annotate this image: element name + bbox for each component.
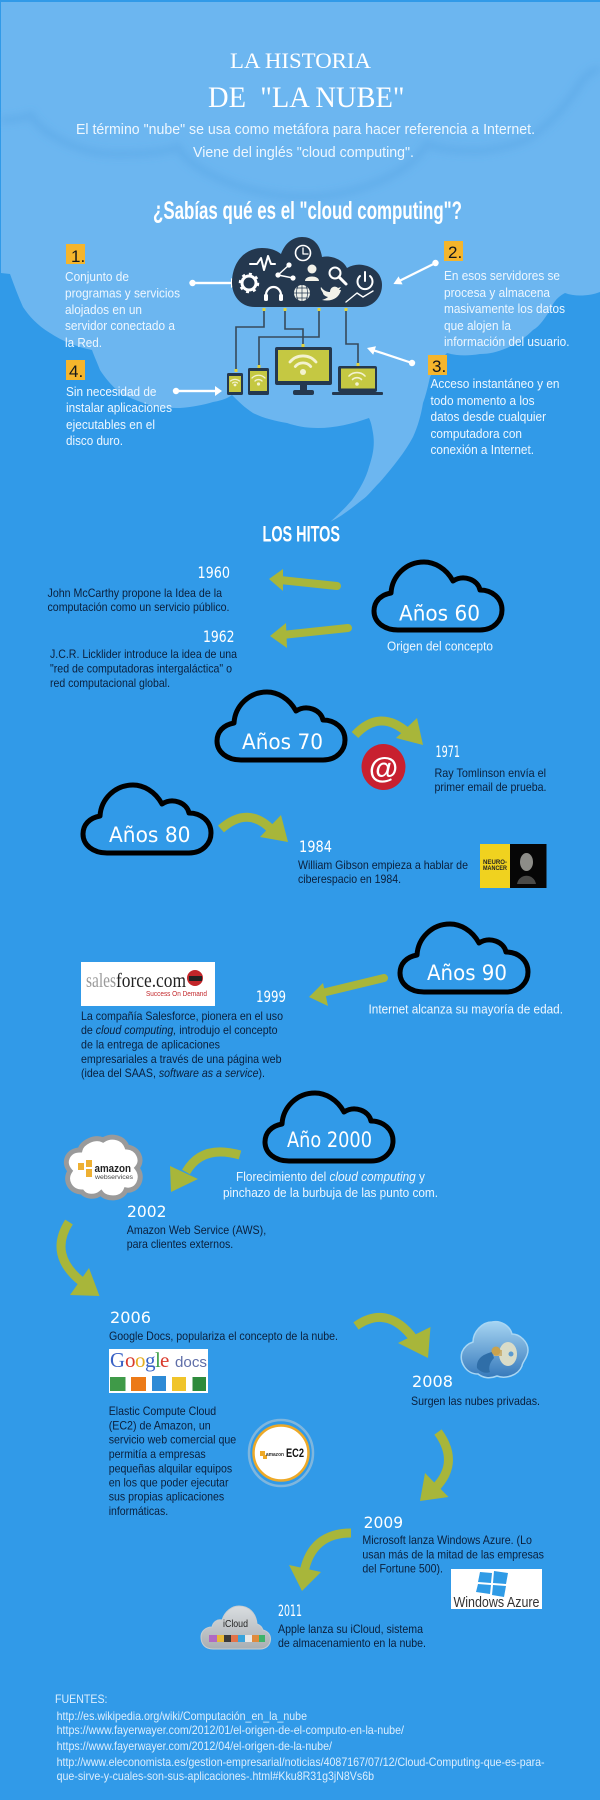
milestone 1984: ciberespacio en 1984. <box>298 872 401 886</box>
logo: amazon web services: webservices <box>94 1175 133 1181</box>
logo: amazon EC2 <box>249 1420 313 1486</box>
logo: windows azure: Windows Azure <box>454 1594 540 1611</box>
panel: point 1: la Red. <box>65 335 102 350</box>
panel: point 4: ejecutables en el <box>66 417 155 432</box>
milestone 1960: John McCarthy propone la Idea de la <box>48 586 222 600</box>
milestone 1960: computación como un servicio público. <box>48 600 230 614</box>
milestone 2011: Apple lanza su iCloud, sistema <box>278 1622 423 1636</box>
cloud: años 90 <box>400 924 528 992</box>
panel: point 3: Acceso instantáneo y en <box>430 376 560 391</box>
logo: salesforce: sales <box>86 970 116 992</box>
panel: point 1: servidor conectado a <box>65 318 176 333</box>
sources: https://www.fayerwayer.com/2012/04/el-origen-de-la-nube/ <box>57 1739 333 1753</box>
icon: email at sign <box>362 744 406 790</box>
milestone 2008: Surgen las nubes privadas. <box>411 1394 540 1408</box>
title: LA HISTORIA <box>230 48 372 73</box>
cloud: años 80: Años 80 <box>109 823 190 847</box>
milestone 2002: para clientes externos. <box>127 1237 233 1251</box>
milestone: EC2 text: servicio web comercial que <box>109 1433 236 1447</box>
cloud: años 60: Años 60 <box>399 602 480 626</box>
milestone 1971: primer email de prueba. <box>434 780 546 794</box>
logo: google docs <box>109 1348 208 1393</box>
cloud: años 90: Años 90 <box>427 961 507 985</box>
panel: point 4: instalar aplicaciones <box>66 400 172 415</box>
milestone: EC2 text: sus propias aplicaciones <box>109 1490 224 1504</box>
cloud: años 70 <box>217 692 345 760</box>
milestone 2011: 2011 <box>278 1601 302 1620</box>
logo: salesforce: Success On Demand <box>146 991 207 998</box>
milestone 1962: 1962 <box>203 627 234 646</box>
logo: windows azure <box>451 1569 542 1611</box>
milestone: EC2 text <box>109 1404 236 1518</box>
icon: private cloud with key <box>461 1322 528 1378</box>
panel: point 1: Conjunto de <box>65 269 129 284</box>
milestone 1962 <box>50 627 237 690</box>
icon: iCloud: iCloud <box>223 1619 248 1630</box>
caption: origen del concepto: Origen del concepto <box>387 638 493 654</box>
milestone 1962: "red de computadoras intergaláctica" o <box>50 662 232 676</box>
milestone 1999: (idea del SAAS, software as a service). <box>81 1066 265 1080</box>
panel: point 4: 4. <box>69 362 83 381</box>
logo: google docs: e <box>160 1348 169 1372</box>
logo: salesforce <box>81 962 215 1006</box>
panel: point 1: 1. <box>71 247 85 266</box>
cloud: años 70: Años 70 <box>242 730 323 754</box>
cloud: año 2000: Año 2000 <box>287 1128 372 1152</box>
logo: google docs: o <box>125 1348 136 1372</box>
arrow: 1984 <box>221 815 288 842</box>
image: neuromancer book: NEURO- <box>483 860 507 866</box>
arrow: 2002 <box>170 1152 240 1192</box>
milestone 2009: Microsoft lanza Windows Azure. (Lo <box>362 1533 532 1547</box>
milestone 1960: 1960 <box>198 563 230 582</box>
logo: amazon EC2: EC2 <box>286 1446 304 1460</box>
panel: point 4 <box>66 360 172 448</box>
milestone 2008: 2008 <box>412 1372 453 1391</box>
panel: point 3: todo momento a los <box>430 393 535 408</box>
title: DE "LA NUBE" <box>208 81 404 114</box>
milestone: EC2 text: permitía a empresas <box>109 1447 206 1461</box>
light speech-bubble cloud <box>0 2 600 522</box>
milestone 2011 <box>278 1601 426 1650</box>
intro text: Viene del inglés "cloud computing". <box>193 145 414 161</box>
logo: amazon web services: amazon <box>94 1163 131 1175</box>
milestone 2009 <box>362 1513 544 1576</box>
arrow: 1960 <box>269 569 337 591</box>
arrow: 2009 <box>420 1432 448 1501</box>
milestone 2002: 2002 <box>127 1202 166 1221</box>
intro text <box>76 122 535 161</box>
heading: los hitos: LOS HITOS <box>262 522 340 546</box>
milestone 1960 <box>48 563 230 614</box>
milestone 1962: red computacional global. <box>50 676 170 690</box>
cloud: años 80 <box>83 785 211 853</box>
milestone 1999: empresariales a través de una página web <box>81 1052 282 1066</box>
sources: que-sirve-y-cuales-son-sus-aplicaciones-.html#Kku8R31g3jN8Vs6b <box>57 1769 374 1783</box>
panel: point 2: información del usuario. <box>444 334 570 349</box>
milestone 1999: 1999 <box>256 987 286 1006</box>
sources <box>55 1692 545 1783</box>
arrow: 2006 <box>61 1222 100 1296</box>
title <box>208 48 404 114</box>
milestone 2002: Amazon Web Service (AWS), <box>127 1223 266 1237</box>
milestone: EC2 text: pequeñas alquilar equipos <box>109 1461 232 1475</box>
dark cloud <box>232 237 382 307</box>
caption: años 90: Internet alcanza su mayoría de edad. <box>368 1002 563 1016</box>
panel: point 3: conexión a Internet. <box>430 442 534 457</box>
panel: point 2: procesa y almacena <box>444 285 551 300</box>
logo: google docs: o <box>135 1348 146 1372</box>
milestone: EC2 text: informáticas. <box>109 1504 168 1518</box>
panel: point 4: Sin necesidad de <box>66 384 156 399</box>
panel: point 3: 3. <box>432 357 446 376</box>
logo: google docs: G <box>110 1348 125 1372</box>
cloud: años 60 <box>374 562 502 630</box>
arrow: 1971 <box>355 718 423 745</box>
caption: año 2000: pinchazo de la burbuja de las punto com. <box>223 1185 438 1200</box>
illustration: cloud and devices <box>227 237 383 395</box>
milestone 1999: de la entrega de aplicaciones <box>81 1038 220 1052</box>
milestone 1971: 1971 <box>436 742 460 761</box>
cloud shading line <box>0 69 600 197</box>
sources: http://www.eleconomista.es/gestion-empresarial/noticias/4087167/07/12/Cloud-Computing-que-es-para- <box>57 1755 545 1769</box>
milestone 1971 <box>434 742 546 794</box>
logo: salesforce: force.com <box>116 970 186 992</box>
milestone: EC2 text: (EC2) de Amazon, un <box>109 1418 211 1432</box>
panel: point 1: alojados en un <box>65 302 142 317</box>
milestone 1984 <box>298 837 468 886</box>
milestone 1984: 1984 <box>299 837 332 856</box>
image: neuromancer book: MANCER <box>483 866 508 872</box>
milestone 2006: Google Docs, populariza el concepto de la nube. <box>109 1329 338 1343</box>
sources: https://www.fayerwayer.com/2012/01/el-origen-de-el-computo-en-la-nube/ <box>57 1723 405 1737</box>
milestone 1999: de cloud computing, introdujo el concepto <box>81 1023 278 1037</box>
milestone 1971: Ray Tomlinson envía el <box>434 766 546 780</box>
milestone 2002 <box>127 1202 266 1251</box>
logo: google docs: docs <box>175 1354 207 1371</box>
arrow: 2008 <box>356 1317 430 1358</box>
panel: point 4: disco duro. <box>66 433 123 448</box>
milestone: EC2 text: Elastic Compute Cloud <box>109 1404 216 1418</box>
panel: point 3: datos desde cualquier <box>430 409 547 424</box>
arrow: 2011 <box>289 1533 351 1591</box>
milestone 2008 <box>411 1372 540 1408</box>
logo: google docs: l <box>155 1348 161 1372</box>
caption: año 2000: Florecimiento del cloud computing y <box>236 1169 425 1184</box>
milestone 1999: La compañía Salesforce, pionera en el uso <box>81 1009 283 1023</box>
cloud icons <box>240 246 373 302</box>
milestone 1999 <box>81 987 286 1080</box>
panel: point 1 <box>65 244 180 350</box>
wires <box>234 308 360 372</box>
milestone 2009: del Fortune 500). <box>362 1562 443 1576</box>
milestone 1962: J.C.R. Licklider introduce la idea de una <box>50 647 237 661</box>
milestone 2006: 2006 <box>110 1308 151 1327</box>
heading: cloud computing question: ¿Sabías qué es el "cloud computing"? <box>153 197 462 225</box>
milestone 2009: 2009 <box>364 1513 403 1532</box>
panel: point 2: masivamente los datos <box>444 301 565 316</box>
panel: point 2: En esos servidores se <box>444 268 560 283</box>
white arrows <box>173 260 439 396</box>
milestone: EC2 text: en los que poder ejecutar <box>109 1476 228 1490</box>
intro text: El término "nube" se usa como metáfora para hacer referencia a Internet. <box>76 122 535 138</box>
logo: amazon web services <box>66 1137 140 1198</box>
milestone 2006 <box>109 1308 338 1343</box>
panel: point 3: computadora con <box>430 426 522 441</box>
panel: point 2 <box>444 241 570 349</box>
cloud: año 2000 <box>265 1093 393 1161</box>
panel: point 3 <box>428 355 560 457</box>
panel: point 1: programas y servicios <box>65 286 180 300</box>
arrow: 1999 <box>309 978 384 1006</box>
milestone 1984: William Gibson empieza a hablar de <box>298 858 468 872</box>
devices <box>227 347 383 395</box>
logo: google docs: g <box>145 1348 156 1372</box>
milestone 2011: de almacenamiento en la nube. <box>278 1636 426 1650</box>
icon: email at sign: @ <box>369 752 398 785</box>
panel: point 2: 2. <box>448 243 462 262</box>
panel: point 2: que alojen la <box>444 318 512 333</box>
caption: año 2000 <box>223 1169 438 1200</box>
sources: http://es.wikipedia.org/wiki/Computación_en_la_nube <box>57 1709 307 1723</box>
image: neuromancer book <box>480 844 546 888</box>
logo: amazon EC2: amazon <box>266 1452 285 1458</box>
sources: FUENTES: <box>55 1692 108 1706</box>
milestone 2009: usan más de la mitad de las empresas <box>362 1548 544 1562</box>
icon: iCloud <box>201 1606 270 1649</box>
arrow: 1962 <box>270 623 348 648</box>
